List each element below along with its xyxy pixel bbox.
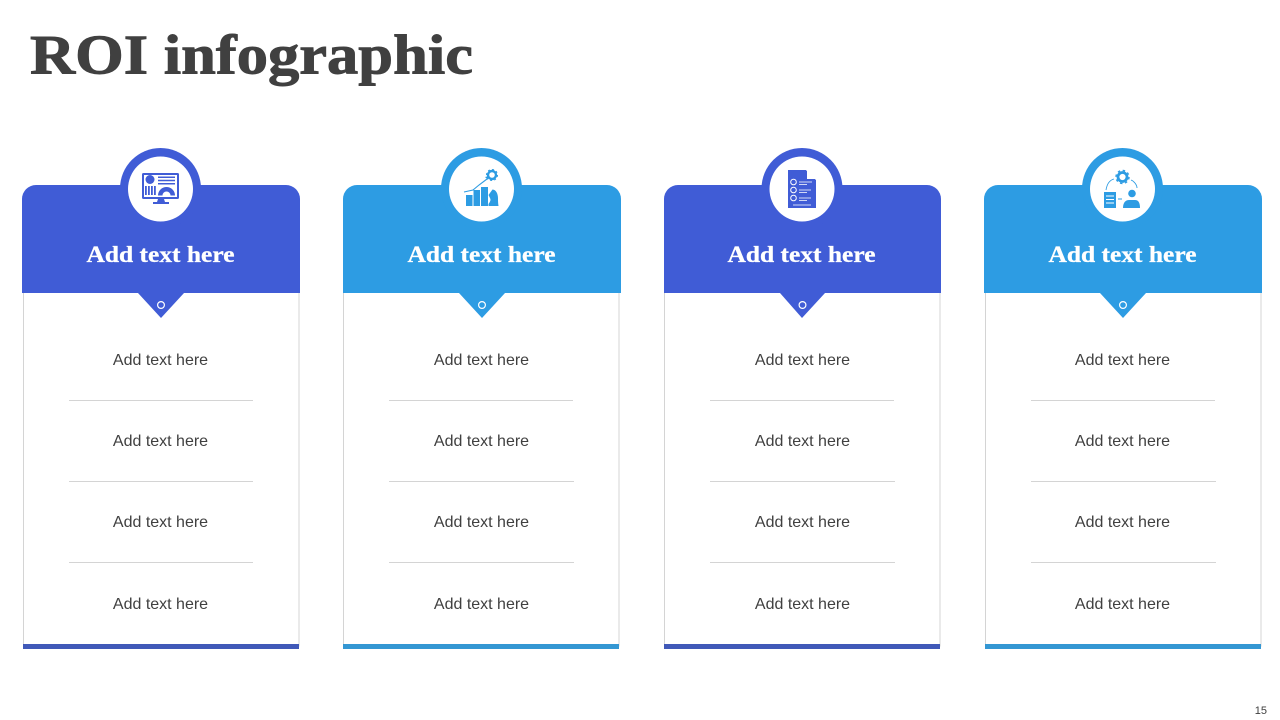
badge inner circle [128, 156, 193, 222]
badge ring [120, 148, 201, 229]
bottom bar [343, 644, 619, 649]
icon: document checklist [788, 170, 816, 208]
header band [984, 185, 1262, 293]
row 1 text: Add text here [1075, 352, 1170, 369]
pointer dot [479, 302, 485, 308]
card heading: Add text here [86, 242, 234, 267]
row 4 text: Add text here [113, 596, 208, 613]
icon: growth chart [464, 170, 498, 206]
pointer [1100, 293, 1146, 318]
row 1 text: Add text here [755, 352, 850, 369]
row 4 text: Add text here [434, 596, 529, 613]
pointer [459, 293, 505, 318]
panel: card 1 [22, 148, 300, 649]
row 2 text: Add text here [755, 433, 850, 450]
card heading: Add text here [408, 242, 556, 267]
card body [986, 280, 1261, 646]
row 2 text: Add text here [113, 433, 208, 450]
row 4 text: Add text here [1075, 596, 1170, 613]
card body [664, 280, 940, 646]
bottom bar [985, 644, 1261, 649]
panel: card 2 [343, 148, 621, 649]
pointer dot [158, 302, 164, 308]
badge inner circle [449, 156, 514, 222]
row 4 text: Add text here [755, 596, 850, 613]
badge inner circle [770, 156, 834, 222]
card body [344, 280, 619, 646]
badge inner circle [1090, 156, 1155, 222]
badge ring [762, 148, 842, 229]
row 1 text: Add text here [434, 352, 529, 369]
icon: process and person [1104, 170, 1140, 208]
bottom bar [664, 644, 940, 649]
pointer [780, 293, 825, 318]
page number: 15 [1255, 705, 1267, 717]
card heading: Add text here [1048, 242, 1196, 267]
badge ring [1082, 148, 1163, 229]
panel: card 4 [984, 148, 1262, 649]
badge ring [441, 148, 522, 229]
row 3 text: Add text here [113, 514, 208, 531]
icon: monitor dashboard [142, 173, 179, 204]
card body [24, 280, 299, 646]
row 3 text: Add text here [755, 514, 850, 531]
pointer dot [799, 302, 806, 308]
header band [22, 185, 300, 293]
pointer dot [1120, 302, 1126, 308]
card heading: Add text here [728, 242, 876, 267]
row 3 text: Add text here [434, 514, 529, 531]
pointer [138, 293, 184, 318]
header band [343, 185, 621, 293]
row 3 text: Add text here [1075, 514, 1170, 531]
panel: card 3 [664, 148, 941, 649]
row 2 text: Add text here [1075, 433, 1170, 450]
bottom bar [23, 644, 299, 649]
row 2 text: Add text here [434, 433, 529, 450]
header band [664, 185, 941, 293]
row 1 text: Add text here [113, 352, 208, 369]
title: ROI infographic [30, 24, 473, 86]
